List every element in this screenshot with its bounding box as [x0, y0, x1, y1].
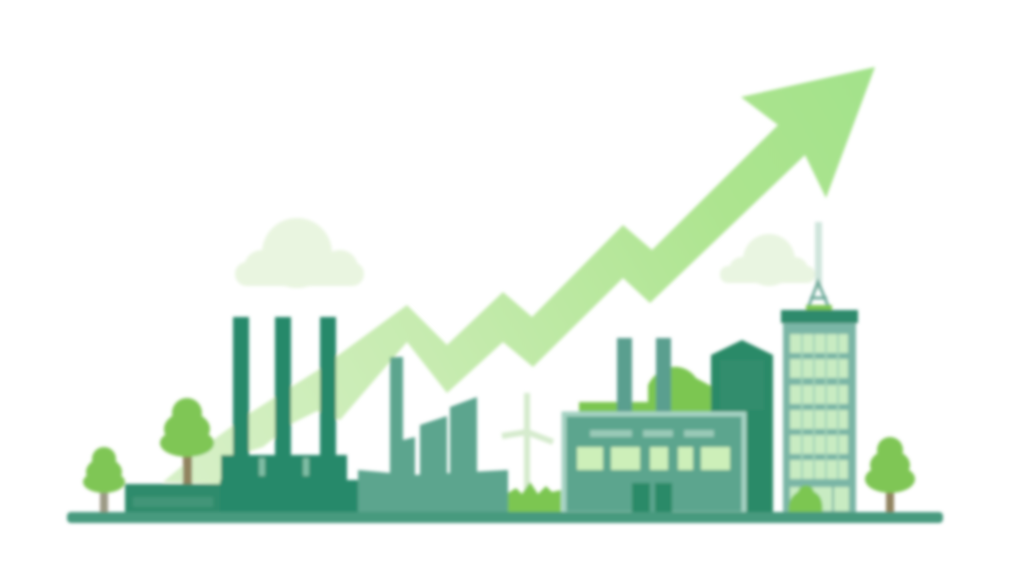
bush in front of tower	[789, 485, 823, 514]
rising zigzag arrow	[163, 67, 875, 484]
cloud: left	[235, 218, 364, 288]
factory chimneys	[617, 338, 671, 414]
grass	[508, 482, 561, 513]
office tower	[781, 310, 858, 514]
wind turbine	[502, 393, 553, 490]
antenna	[806, 222, 832, 311]
second factory with sawtooth roof	[358, 357, 508, 513]
tree: left	[160, 398, 214, 486]
ground line	[67, 512, 943, 523]
tree: right	[865, 437, 915, 514]
triple-stack factory	[220, 317, 359, 514]
silo tower	[711, 340, 773, 514]
bush behind factory	[579, 367, 711, 414]
main factory	[564, 414, 744, 514]
cloud: right	[720, 234, 815, 286]
tree: far left	[83, 447, 125, 514]
low building	[125, 484, 222, 513]
